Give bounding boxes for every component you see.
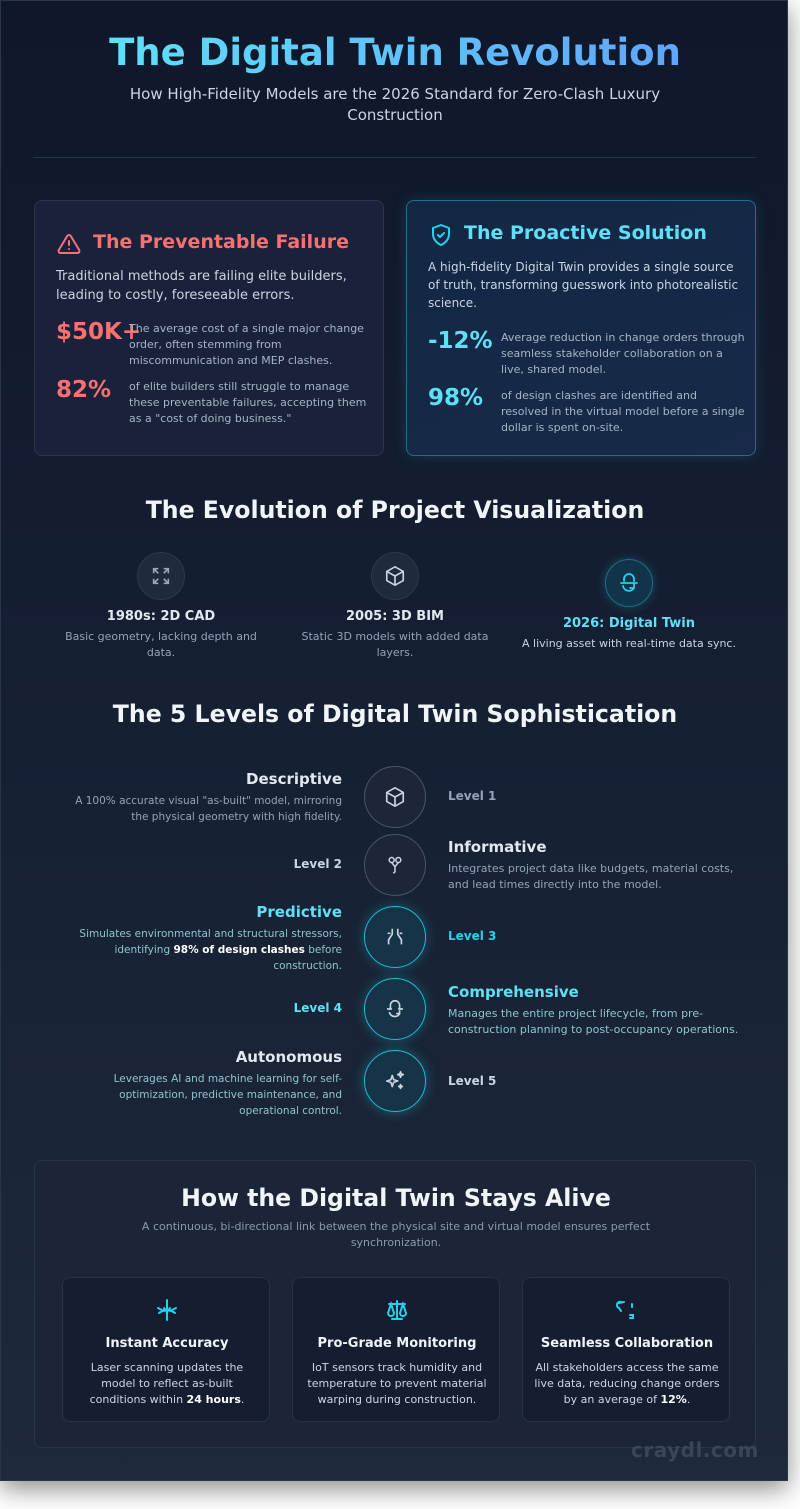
level 3: Level 3 — [448, 929, 496, 943]
level 4: Manages the entire project lifecycle, from pre-construction planning to post-occupancy operations. — [448, 1007, 738, 1036]
intro text: A high-fidelity Digital Twin provides a single source of truth, transforming guesswork into photorealistic science. — [428, 260, 738, 310]
stat: 98%: of design clashes are identified and resolved in the virtual model before a single dollar is spent on-site. — [501, 389, 745, 434]
card: instant accuracy: Instant Accuracy — [106, 1336, 228, 1351]
stat: 98%: 98% — [428, 385, 483, 411]
stat: -12%: Average reduction in change orders through seamless stakeholder collaboration on a live, shared model. — [501, 331, 745, 376]
watermark: craydl.com — [631, 1438, 759, 1462]
intro text: Traditional methods are failing elite builders, leading to costly, foreseeable errors. — [56, 269, 347, 303]
timeline: 3D BIM — [302, 552, 488, 659]
level 5 — [114, 1044, 496, 1118]
level 1: Level 1 — [448, 789, 496, 803]
level 5: Leverages AI and machine learning for self-optimization, predictive maintenance, and operational control. — [114, 1073, 342, 1117]
card: collaboration — [522, 1277, 730, 1422]
level 1 — [75, 766, 496, 828]
card: collaboration: Seamless Collaboration — [541, 1336, 713, 1351]
timeline: Digital Twin — [522, 556, 736, 650]
timeline: Digital Twin: 2026: Digital Twin — [563, 616, 695, 631]
icon: scale — [387, 1300, 407, 1320]
icon: cube — [364, 766, 426, 828]
icon: link — [364, 834, 426, 896]
timeline: 3D BIM: 2005: 3D BIM — [346, 609, 444, 624]
level 2 — [294, 834, 733, 896]
level 4: Comprehensive — [448, 983, 579, 1001]
card: monitoring — [292, 1277, 500, 1422]
level 3: Simulates environmental and structural stressors, identifying 98% of design clashes before construction. — [79, 928, 342, 972]
title: The Digital Twin Revolution — [109, 31, 681, 74]
timeline: Digital Twin: A living asset with real-time data sync. — [522, 637, 736, 650]
icon: sync — [605, 559, 653, 607]
panel: proactive solution — [406, 200, 756, 456]
level 4: Level 4 — [294, 1001, 342, 1015]
card: instant accuracy: Laser scanning updates the model to reflect as-built conditions within 24 hours. — [90, 1361, 244, 1406]
level 3 — [79, 900, 496, 973]
card: monitoring: IoT sensors track humidity and temperature to prevent material warping during construction. — [307, 1361, 487, 1406]
stat: 82%: of elite builders still struggle to manage these preventable failures, accepting them as a "cost of doing business." — [129, 380, 366, 425]
level 2: Integrates project data like budgets, material costs, and lead times directly into the model. — [448, 862, 733, 891]
level 1: Descriptive — [246, 770, 342, 788]
level 1: A 100% accurate visual "as-built" model, mirroring the physical geometry with high fidelity. — [75, 795, 342, 823]
heading: The Proactive Solution — [464, 222, 707, 244]
panel: preventable failure — [34, 200, 384, 456]
card: instant accuracy — [62, 1277, 270, 1422]
icon: cube — [371, 552, 419, 600]
panel: stays alive — [34, 1160, 756, 1448]
stat: $50K+: $50K+ — [56, 319, 141, 345]
card: collaboration: All stakeholders access the same live data, reducing change orders by an average of 12%. — [534, 1361, 720, 1406]
level 5: Level 5 — [448, 1074, 496, 1088]
heading: How the Digital Twin Stays Alive — [181, 1184, 611, 1212]
stat: $50K+: The average cost of a single major change order, often stemming from miscommunication and MEP clashes. — [129, 322, 364, 367]
heading: evolution: The Evolution of Project Visualization — [146, 496, 644, 524]
icon: sparkles — [364, 1050, 426, 1112]
icon: flask — [364, 906, 426, 968]
icon: shield — [432, 224, 450, 246]
heading: 5 levels: The 5 Levels of Digital Twin Sophistication — [113, 700, 677, 728]
icon: cycle — [364, 978, 426, 1040]
icon: expand — [137, 552, 185, 600]
level 4 — [294, 972, 738, 1046]
icon: scan — [157, 1299, 177, 1321]
icon: collaboration — [616, 1300, 634, 1319]
icon: warning — [58, 234, 80, 254]
level 2: Informative — [448, 838, 547, 856]
level 5: Autonomous — [236, 1048, 342, 1066]
card: monitoring: Pro-Grade Monitoring — [318, 1336, 476, 1351]
description: A continuous, bi-directional link between the physical site and virtual model ensures perfect synchronization. — [142, 1220, 650, 1249]
timeline: 2D CAD — [65, 552, 257, 659]
subtitle: How High-Fidelity Models are the 2026 Standard for Zero-Clash Luxury Construction — [130, 85, 660, 124]
level 2: Level 2 — [294, 857, 342, 871]
timeline: 2D CAD: Basic geometry, lacking depth and data. — [65, 630, 257, 659]
heading: The Preventable Failure — [93, 231, 349, 253]
level 3: Predictive — [256, 903, 342, 921]
timeline: 3D BIM: Static 3D models with added data layers. — [302, 630, 488, 659]
timeline: 2D CAD: 1980s: 2D CAD — [107, 609, 215, 624]
stat: -12%: -12% — [428, 328, 493, 354]
stat: 82%: 82% — [56, 377, 111, 403]
